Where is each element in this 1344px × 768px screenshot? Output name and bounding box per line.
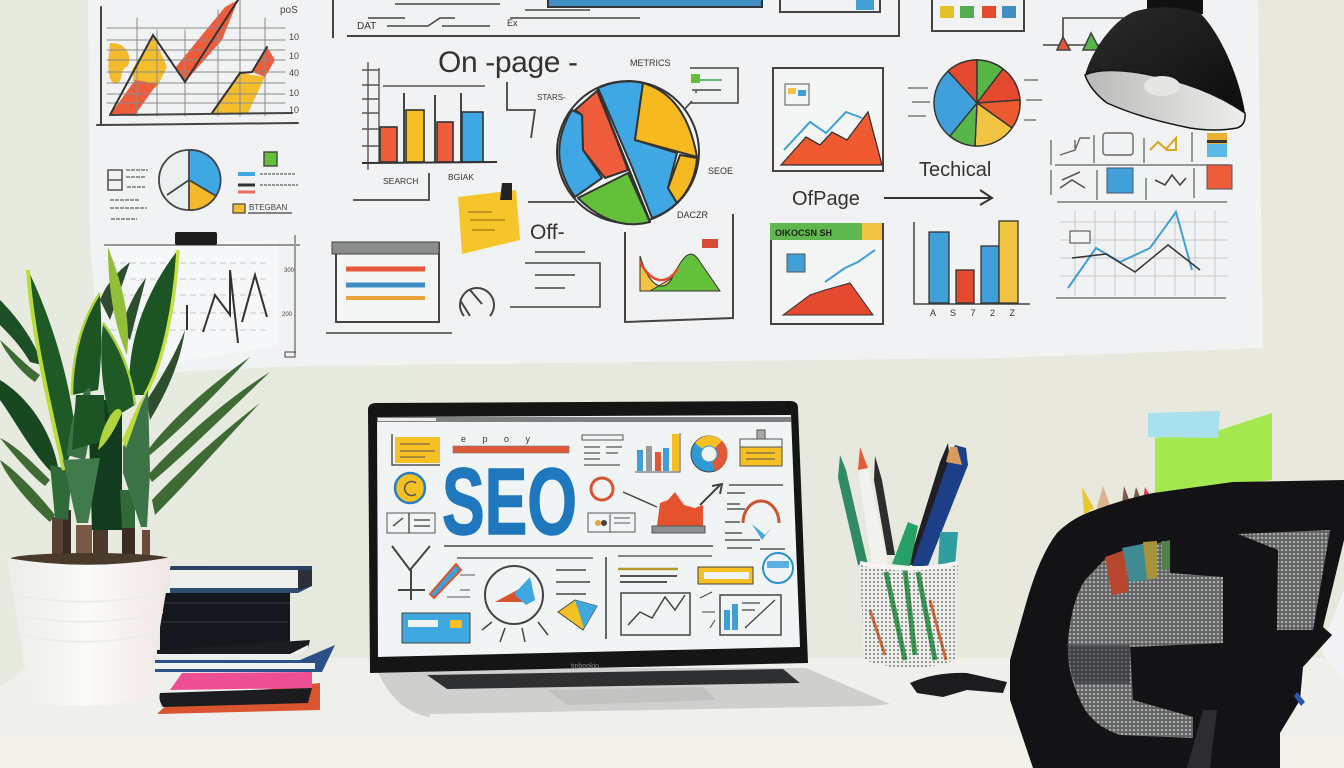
chart axis labels: 10: [289, 32, 299, 42]
left legend notes: [108, 152, 298, 219]
screen: left icons: [387, 473, 435, 533]
small pie chart top right: [908, 60, 1042, 146]
heading: On-page: On -page -: [438, 46, 578, 79]
label: search and: [383, 172, 474, 186]
labels: seoe dacr: SEOE: [708, 166, 733, 176]
text lines: [510, 252, 600, 307]
laptop screen: [377, 415, 800, 657]
laptop: [368, 401, 890, 718]
labels: seoe dacr: [677, 166, 733, 220]
labels: seoe dacr: DACZR: [677, 210, 708, 220]
small donut pie: [159, 150, 221, 210]
screen: top widgets: e p o y: [461, 434, 537, 444]
bar chart: right: [914, 221, 1030, 318]
browser wireframe panel: [326, 242, 452, 333]
screen: bottom icons: [392, 546, 793, 643]
large pie chart: [557, 81, 699, 224]
chart axis labels: 10: [289, 105, 299, 115]
left legend notes: BTEGBAN: [249, 203, 287, 212]
label: E: Ex: [507, 18, 518, 28]
thin back leaves: [0, 262, 270, 522]
chart: top-left area graph: [97, 0, 298, 125]
card title: OIKOCSN SH: [775, 228, 832, 238]
heading: off page with arrow: OfPage: [792, 188, 860, 210]
desk lamp: [1085, 0, 1245, 130]
sticky note: [458, 183, 520, 254]
chart axis labels: 40: [289, 68, 299, 78]
label: DAT: DAT: [357, 21, 376, 32]
top strip diagram: [333, 0, 1024, 38]
chair mesh: [1068, 540, 1223, 738]
chart axis labels: [280, 5, 299, 115]
axis labels: A S 7 2 Z: [930, 308, 1021, 318]
sticky notes on wall: [1148, 411, 1272, 493]
chart axis labels: poS: [280, 5, 298, 16]
technical grid panel: [1051, 132, 1232, 202]
bracket lines: [353, 82, 575, 202]
notebook: [158, 672, 320, 714]
stems: [52, 510, 150, 565]
poster sheet: [88, 0, 1263, 372]
books seen through mesh: [1105, 541, 1170, 595]
pinned chart sheet: [104, 232, 300, 366]
pinned chart sheet: 200: [282, 312, 293, 318]
label: metrics: METRICS: [630, 58, 670, 68]
screen: top widgets: [392, 430, 782, 472]
laptop brand label: tinbookio: [571, 663, 599, 670]
dashboard card: [770, 223, 883, 324]
refresh icon: [460, 288, 494, 316]
chair post: [1187, 710, 1217, 768]
chart axis labels: 10: [289, 51, 299, 61]
pencil cup: [838, 443, 968, 668]
screen: right details: [725, 485, 785, 549]
label: stars: STARS-: [537, 93, 566, 102]
mini callout box: [684, 68, 738, 110]
colored pencils behind chair: [1082, 486, 1151, 515]
stacked books: [155, 566, 335, 672]
heading: technical: Techical: [919, 159, 991, 181]
label: search and: SEARCH: [383, 176, 418, 186]
line chart with grid: [1056, 210, 1228, 298]
laptop base: [376, 668, 890, 718]
soil: [10, 553, 170, 565]
pinned chart sheet: 300: [284, 268, 295, 274]
desk surface: [0, 658, 1344, 768]
screen: headline SEO: SEO: [442, 449, 577, 555]
pot: [7, 557, 172, 706]
chart axis labels: 10: [289, 88, 299, 98]
office chair: [910, 480, 1344, 768]
right paper on desk: [1320, 590, 1344, 680]
screen: centre flow: [588, 478, 722, 533]
mountain chart: [625, 214, 733, 322]
chair armrest: [910, 673, 1007, 697]
laptop lid: [368, 401, 808, 673]
chair frame: [1010, 480, 1344, 768]
bar chart: on-page: [362, 62, 497, 170]
heading: off: Off-: [530, 221, 565, 244]
broad leaves: [0, 247, 178, 530]
heading: off page with arrow: [792, 188, 992, 210]
darker mesh band: [1068, 645, 1130, 684]
area chart frame: [773, 68, 883, 171]
plant: [0, 247, 270, 706]
tree diagram icon: [1043, 18, 1127, 50]
label: search and: BGIAK: [448, 172, 474, 182]
